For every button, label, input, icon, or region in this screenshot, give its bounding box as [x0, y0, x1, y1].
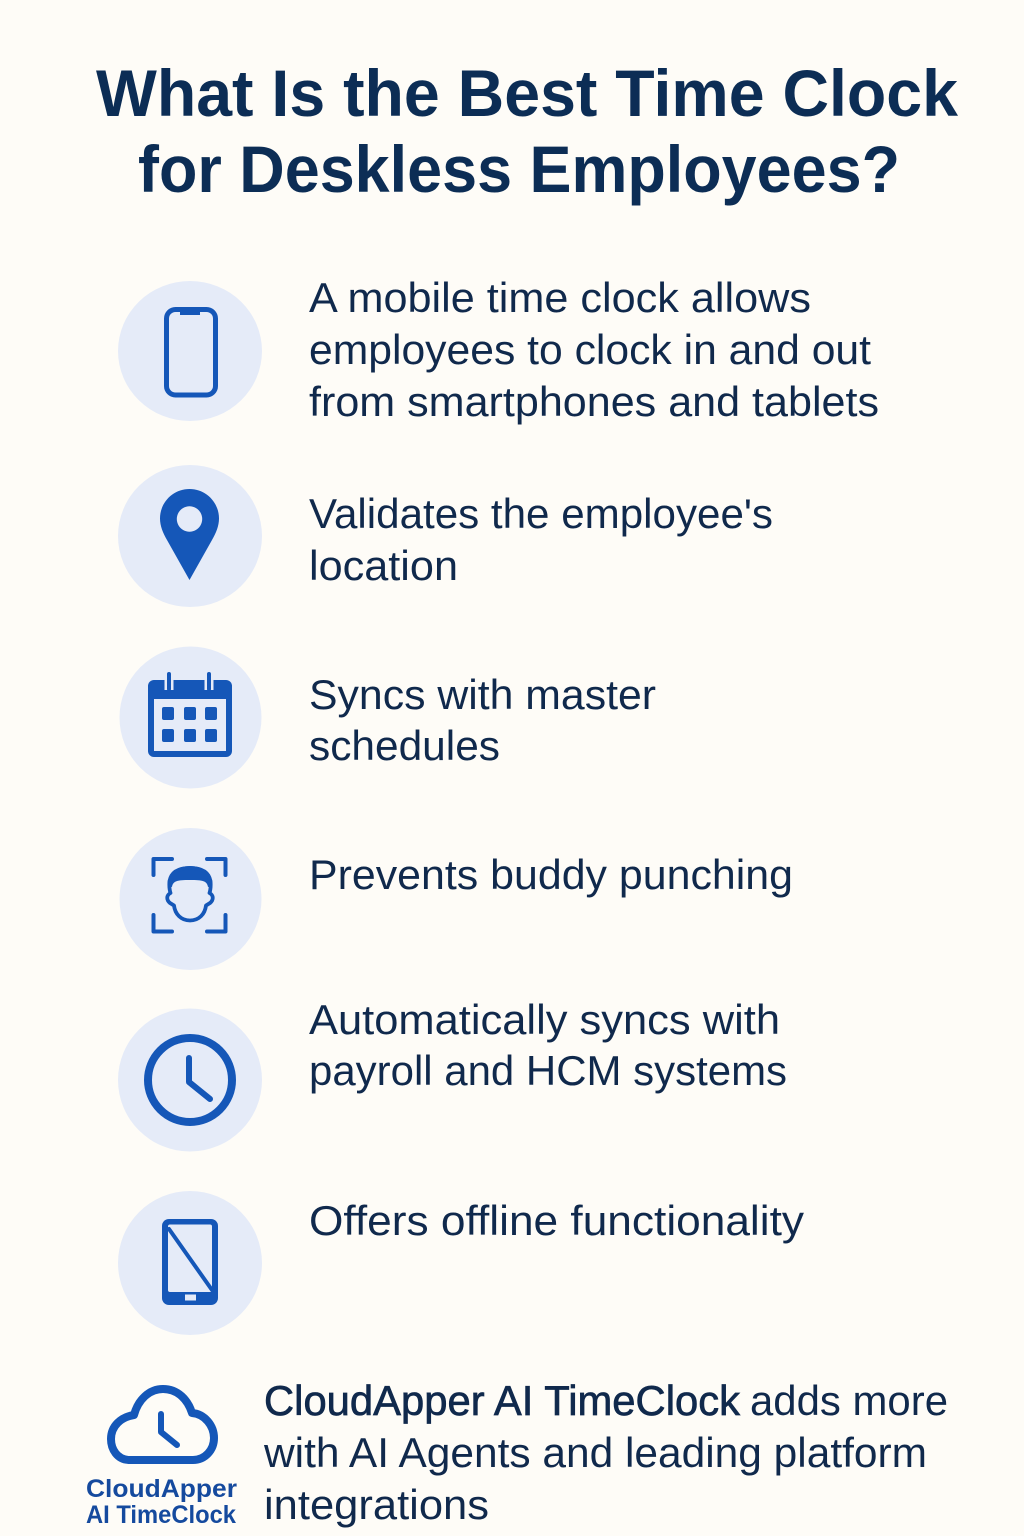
- text: mobile time clock: employees to clock in and out: [309, 326, 871, 373]
- text: payroll sync: Automatically syncs with: [309, 996, 780, 1043]
- icon: CloudApper logo: AI TimeClock: [86, 1501, 236, 1529]
- text: location validation: [309, 490, 773, 589]
- text: offline functionality: Offers offline functionality: [309, 1197, 804, 1244]
- text: mobile time clock: from smartphones and tablets: [309, 378, 879, 425]
- icon: smartphone: [118, 281, 262, 421]
- panel: location validation: [118, 465, 773, 607]
- text: CloudApper summary: [263, 1377, 948, 1528]
- text: payroll sync: payroll and HCM systems: [309, 1047, 787, 1094]
- icon: face scan: [120, 828, 262, 970]
- icon: CloudApper logo: [86, 1389, 237, 1529]
- panel: CloudApper footer: [86, 1377, 948, 1529]
- icon: CloudApper logo: CloudApper: [86, 1475, 237, 1503]
- icon: calendar: [120, 646, 262, 788]
- title: What Is the Best Time Clock: [96, 56, 958, 130]
- icon: clock: [118, 1008, 262, 1152]
- text: schedule sync: [309, 671, 656, 769]
- text: mobile time clock: [309, 274, 879, 425]
- text: location validation: Validates the employee's: [309, 490, 773, 537]
- icon: offline tablet: [118, 1191, 262, 1335]
- text: schedule sync: Syncs with master: [309, 671, 656, 718]
- title: [96, 56, 958, 206]
- text: buddy punching: Prevents buddy punching: [309, 851, 793, 898]
- icon: location pin: [118, 465, 262, 607]
- text: mobile time clock: A mobile time clock allows: [309, 274, 811, 321]
- panel: schedule sync: [120, 646, 656, 788]
- panel: payroll sync: [118, 996, 787, 1152]
- panel: offline functionality: [118, 1191, 804, 1335]
- text: location validation: location: [309, 542, 458, 589]
- panel: buddy punching: [120, 828, 793, 970]
- text: payroll sync: [309, 996, 787, 1094]
- text: CloudApper summary: with AI Agents and leading platform: [263, 1429, 927, 1476]
- text: CloudApper summary: integrations: [264, 1481, 489, 1528]
- text: CloudApper summary: adds more: [750, 1377, 948, 1424]
- text: CloudApper summary: CloudApper AI TimeClock: [264, 1377, 741, 1424]
- title: for Deskless Employees?: [138, 132, 900, 206]
- panel: mobile time clock: [118, 274, 879, 425]
- text: schedule sync: schedules: [309, 722, 500, 769]
